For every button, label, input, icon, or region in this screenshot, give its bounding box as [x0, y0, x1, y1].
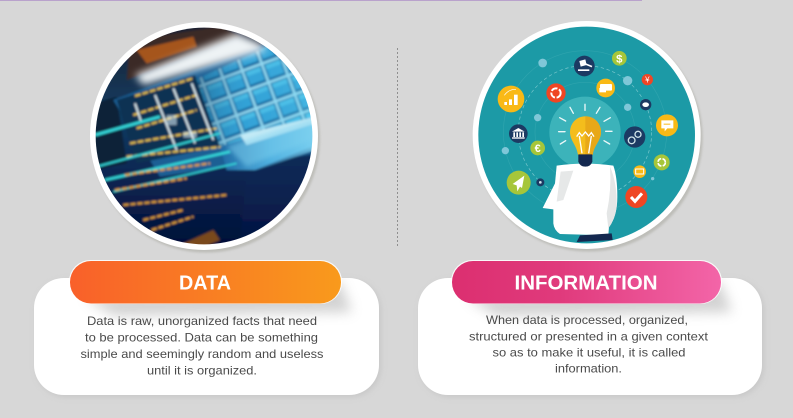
data description: until it is organized.	[147, 364, 257, 378]
information heading pill	[451, 260, 722, 304]
decorative dots	[502, 59, 654, 180]
icon: dollar	[612, 51, 627, 66]
icon: yen: ¥	[645, 76, 650, 85]
icon: small yellow monitor	[633, 165, 646, 178]
icon: euro	[530, 141, 545, 155]
icon: dollar: $	[616, 53, 623, 65]
data heading pill: DATA	[179, 272, 231, 294]
panel: data	[34, 260, 381, 397]
data description: simple and seemingly random and useless	[80, 347, 324, 361]
light bulb	[570, 116, 601, 167]
icon: chat yellow	[596, 79, 615, 97]
data heading pill	[69, 260, 342, 304]
icon: euro: €	[535, 143, 541, 155]
information description: so as to make it useful, it is called	[492, 346, 686, 360]
bulb halo	[549, 97, 621, 168]
icon: recycle	[654, 154, 670, 170]
head	[543, 164, 617, 242]
icon: gavel	[574, 56, 595, 76]
information heading pill: INFORMATION	[514, 272, 658, 294]
photo: laptop keyboard with code	[90, 22, 320, 253]
information description: structured or presented in a given context	[469, 330, 709, 344]
information pill shadow	[467, 282, 732, 316]
icon: yen	[642, 74, 653, 85]
information description	[469, 313, 709, 376]
icon: speech bubble	[656, 114, 678, 136]
icon: small navy search	[536, 178, 544, 186]
vertical dashed divider	[396, 48, 398, 246]
icon: gears	[624, 126, 645, 148]
data description: to be processed. Data can be something	[85, 330, 318, 344]
icon: bank	[509, 124, 528, 143]
data pill shadow	[85, 282, 352, 316]
data description: Data is raw, unorganized facts that need	[87, 314, 317, 328]
icon: small navy bubble	[640, 99, 651, 110]
illustration: head with light bulb and icons	[473, 21, 703, 252]
icon: paper plane	[507, 171, 531, 195]
icon: red cycle	[546, 83, 566, 103]
icon: growth chart	[498, 86, 524, 112]
panel: information	[418, 260, 764, 397]
icon: check	[625, 186, 647, 208]
data description	[80, 314, 324, 378]
information description: information.	[555, 362, 622, 376]
bulb rays	[559, 104, 612, 144]
information description: When data is processed, organized,	[486, 313, 688, 327]
top purple rule	[0, 0, 642, 1]
